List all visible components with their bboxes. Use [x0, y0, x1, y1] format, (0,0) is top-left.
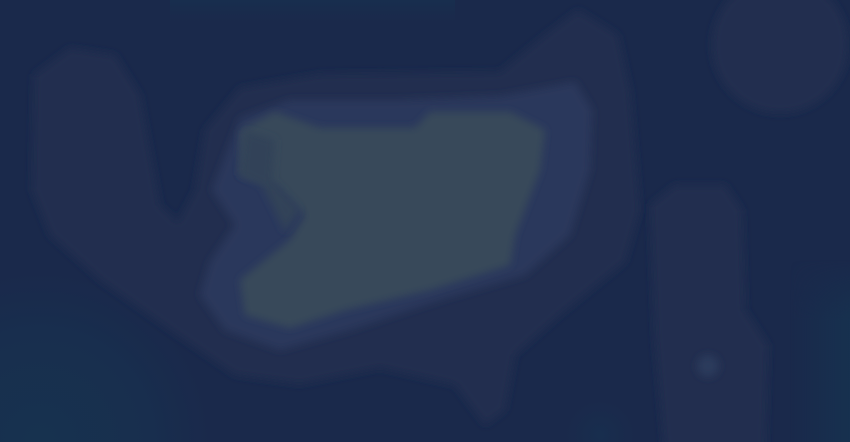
outer map halo	[32, 10, 640, 425]
core darker inlet	[240, 130, 300, 232]
map core	[240, 112, 545, 328]
small spot in right region	[697, 355, 719, 377]
column: right region	[650, 185, 768, 442]
circle: top right region	[712, 0, 848, 113]
teal corner tints	[14, 415, 66, 442]
inner map ring	[200, 82, 592, 350]
